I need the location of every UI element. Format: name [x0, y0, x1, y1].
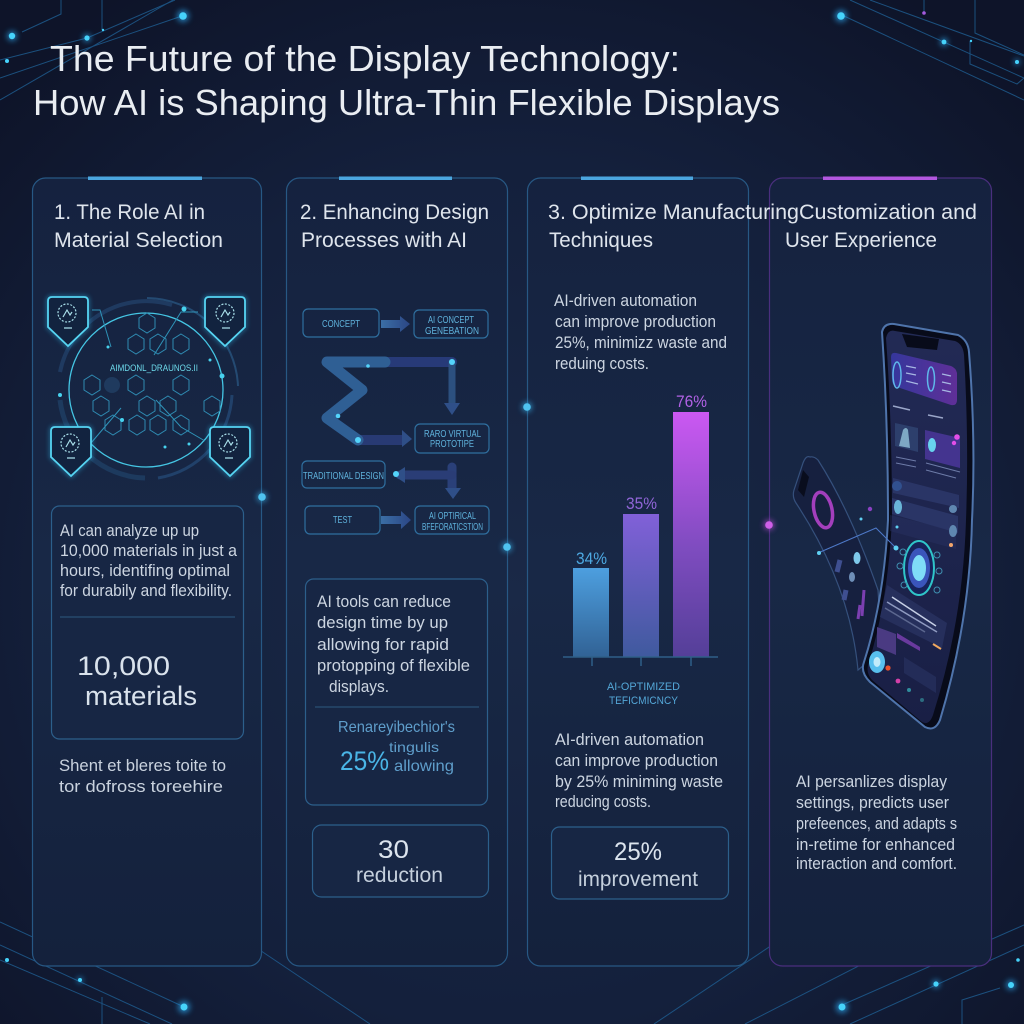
large curved phone [817, 324, 973, 728]
panel 2: design processes [286, 176, 508, 966]
panel 1 heading: 1. The Role AI in [54, 200, 205, 224]
process flow diagram: TRADITIONAL DESIGN [303, 470, 384, 482]
automation statement 2: can improve production [555, 752, 718, 770]
design time statement: AI tools can reduce [317, 593, 451, 611]
bar chart: 34% [576, 549, 607, 568]
process flow diagram: CONCEPT [322, 318, 360, 330]
panel 3: manufacturing [528, 176, 799, 966]
panel 2 heading: 2. Enhancing Design [300, 200, 489, 224]
small curved phone [793, 457, 882, 670]
panel 1 footnote: Shent et bleres toite to [59, 757, 226, 775]
panel 1 text box [52, 506, 244, 739]
design time statement: displays. [329, 678, 389, 696]
panel 4 heading: Customization and [799, 200, 977, 224]
behaviour stat: Renareyibechior's [338, 719, 455, 736]
phone notch [902, 334, 939, 350]
stat: 30 reduction [312, 825, 488, 897]
process flow diagram: TEST [333, 514, 352, 526]
personalization statement: prefeences, and adapts s [796, 815, 957, 833]
stat: 10,000 materials [77, 651, 197, 711]
behaviour stat [338, 719, 455, 776]
AI material network diagram [48, 297, 250, 478]
bar chart: 76% [676, 392, 707, 411]
panel 2 heading [300, 200, 489, 252]
bar chart: 35% [626, 494, 657, 513]
brain glyphs [58, 304, 237, 458]
title [33, 38, 780, 123]
analysis statement [60, 522, 238, 600]
design time statement: allowing for rapid [317, 636, 449, 654]
behaviour stat: 25% [340, 746, 389, 776]
personalization statement: in-retime for enhanced [796, 836, 955, 854]
phone orb [897, 541, 942, 595]
stat: 10,000 materials: 10,000 [77, 651, 170, 681]
automation statement: reduing costs. [555, 355, 649, 373]
process flow diagram [302, 309, 489, 534]
process flow diagram: PROTOTIPE [430, 438, 474, 450]
design time statement [317, 593, 470, 696]
automation statement: can improve production [555, 313, 716, 331]
automation statement: 25%, minimizz waste and [555, 334, 727, 352]
panel 4 heading: User Experience [785, 228, 937, 252]
automation statement 2: reducing costs. [555, 793, 651, 811]
stat: 30 reduction: 30 [378, 836, 409, 864]
title: How AI is Shaping Ultra-Thin Flexible Displays [33, 82, 780, 123]
panel connector nodes [257, 402, 774, 552]
phone lower card [877, 627, 896, 655]
panel 3 heading: Techniques [549, 228, 653, 252]
panel 4 heading [785, 200, 977, 252]
stat: 25% improvement [552, 827, 728, 899]
panel 1 heading [54, 200, 223, 252]
stat: 25% improvement: improvement [578, 868, 698, 891]
process flow diagram: AI CONCEPT [428, 314, 474, 326]
shield icons glow [48, 297, 250, 476]
panel 3 heading [548, 200, 799, 252]
panel 3 heading: 3. Optimize Manufacturing [548, 200, 799, 224]
panel 2 heading: Processes with AI [301, 228, 467, 252]
shield icons [48, 297, 250, 476]
process flow diagram: AI OPTIRICAL [429, 510, 476, 522]
panel 2 text box [306, 579, 488, 805]
process flow diagram: BFEFORATICSTION [422, 521, 483, 533]
bar chart [563, 392, 718, 707]
phone promo card [891, 353, 957, 405]
stat: 25% improvement: 25% [614, 838, 662, 866]
phone text card [880, 585, 947, 648]
phone content cards [895, 423, 918, 452]
behaviour stat: tingulis [389, 739, 439, 755]
analysis statement: AI can analyze up up [60, 522, 199, 540]
analysis statement: hours, identifing optimal [60, 562, 230, 580]
panel 1 footnote [59, 757, 226, 796]
stat: 10,000 materials: materials [85, 681, 197, 711]
stat: 30 reduction: reduction [356, 864, 443, 887]
personalization statement: interaction and comfort. [796, 855, 957, 873]
bar chart: TEFICMICNCY [609, 695, 679, 707]
automation statement [554, 292, 727, 373]
title: The Future of the Display Technology: [50, 38, 680, 79]
personalization statement: AI persanlizes display [796, 773, 948, 791]
personalization statement: settings, predicts user [796, 794, 949, 812]
automation statement 2: by 25% miniming waste [555, 773, 723, 791]
behaviour stat: allowing [394, 758, 454, 775]
process flow diagram: GENEBATION [425, 325, 479, 337]
panel 4: customization [770, 176, 992, 966]
panel 1 heading: Material Selection [54, 228, 223, 252]
analysis statement: for durabily and flexibility. [60, 582, 232, 600]
link between phones [818, 528, 896, 553]
analysis statement: 10,000 materials in just a [60, 542, 238, 560]
panel 1 footnote: tor dofross toreehire [59, 778, 223, 796]
panel 1: material selection [32, 176, 262, 966]
design time statement: protopping of flexible [317, 657, 470, 675]
automation statement 2: AI-driven automation [555, 731, 704, 749]
automation statement 2 [555, 731, 723, 811]
process flow diagram: RARO VIRTUAL [424, 428, 481, 440]
automation statement: AI-driven automation [554, 292, 697, 310]
bar chart: AI-OPTIMIZED [607, 681, 680, 693]
personalization statement [796, 773, 957, 873]
diagram label: AIMDONL_DRAUNOS.II [110, 363, 198, 373]
design time statement: design time by up [317, 614, 448, 632]
